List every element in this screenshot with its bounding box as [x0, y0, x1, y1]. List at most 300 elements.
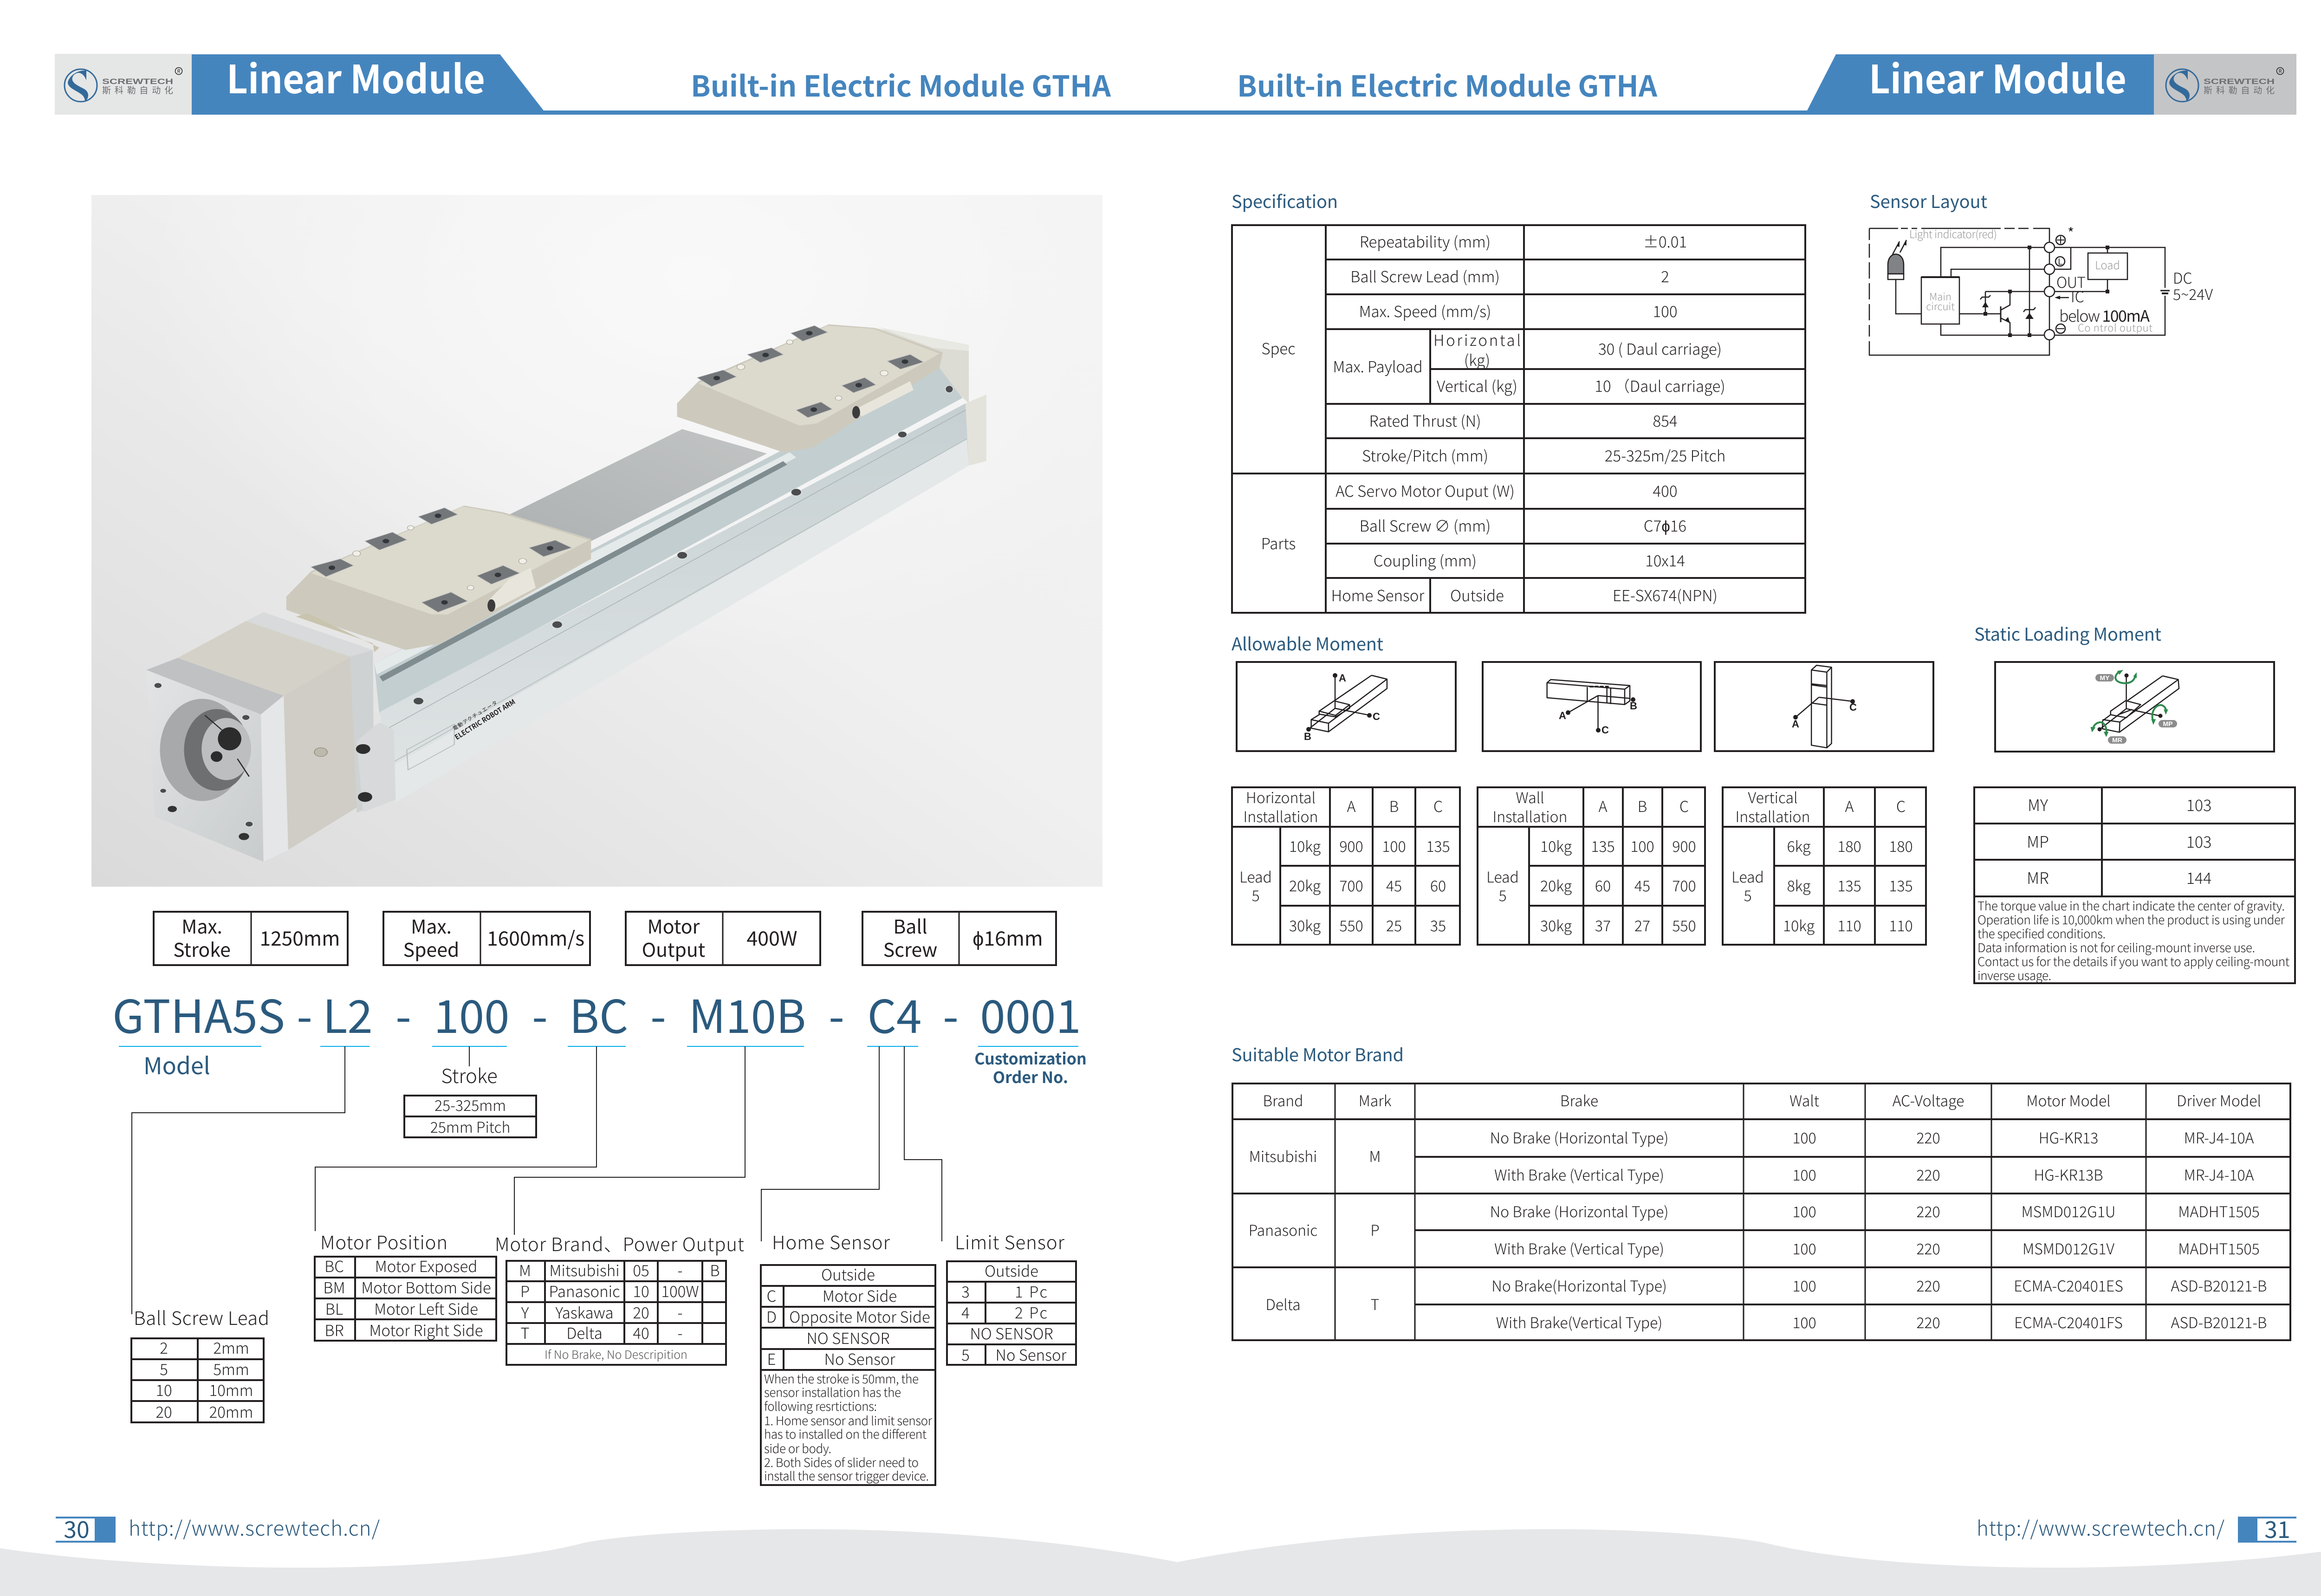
table: motor position: BC [324, 1254, 344, 1277]
label: Home Sensor: Home Sensor [772, 1228, 890, 1255]
limit sensor block [947, 1228, 1076, 1365]
table: suitable motor brand: 100 [1792, 1238, 1816, 1259]
table: motor brand: Y [521, 1301, 529, 1323]
table: suitable motor brand: Walt [1789, 1090, 1819, 1111]
table: suitable motor brand [1232, 1083, 2290, 1340]
spec box: Max. Stroke [154, 911, 348, 965]
model code: - [943, 980, 959, 1046]
table: suitable motor brand: ASD-B20121-B [2171, 1311, 2267, 1333]
table: wall installation: 37 [1595, 915, 1611, 936]
label: Limit Sensor: Limit Sensor [955, 1228, 1065, 1255]
table: specification: Horizontal [1433, 328, 1521, 350]
code underlines [119, 1046, 1078, 1047]
table: ball screw lead: 10 [156, 1378, 172, 1401]
table: home sensor: D [766, 1305, 777, 1327]
notes [1977, 897, 2289, 984]
table: home sensor: NO SENSOR [806, 1326, 890, 1349]
table: home sensor: Opposite Motor Side [789, 1305, 930, 1327]
section: static loading moment [1974, 620, 2295, 984]
spec box: Max. Speed: 1600mm/s [487, 923, 584, 952]
header: left [55, 49, 1176, 115]
notes: Operation life is 10,000km when the product is using under [1977, 911, 2285, 928]
table: specification: Max. Speed (mm/s) [1359, 299, 1491, 322]
table: suitable motor brand: With Brake (Vertical Type) [1494, 1164, 1664, 1185]
table: specification: Repeatability (mm) [1360, 230, 1491, 252]
diagram: static moment: MR [2112, 736, 2122, 744]
table: limit sensor: NO SENSOR [970, 1322, 1053, 1344]
connector lines [132, 1046, 942, 1314]
spec box: Motor Output [626, 911, 820, 965]
notes: Contact us for the details if you want to apply ceiling-mount [1977, 953, 2289, 970]
table: motor position: BR [324, 1318, 344, 1341]
table: static moment values: MP [2027, 830, 2049, 852]
table: wall installation: 100 [1630, 835, 1654, 856]
table: ball screw lead: 10mm [209, 1378, 253, 1401]
table: specification: 25-325m/25 Pitch [1605, 444, 1725, 466]
table: ball screw lead: 5 [160, 1357, 168, 1380]
table: horizontal installation: 100 [1382, 835, 1406, 856]
table: home sensor: 2. Both Sides of slider need to [764, 1453, 919, 1471]
table: static moment values: MY [2028, 793, 2048, 816]
banner: right [1176, 54, 2154, 115]
stroke block [404, 1061, 536, 1137]
spec box: Max. Stroke: 1250mm [260, 923, 340, 952]
model code: - [395, 980, 411, 1046]
spec box: Ball Screw: Ball [893, 911, 927, 939]
table: wall installation: 27 [1634, 915, 1650, 936]
table: specification: ±0.01 [1643, 230, 1687, 252]
table: specification: 400 [1653, 479, 1677, 501]
table: suitable motor brand: MADHT1505 [2178, 1238, 2260, 1259]
table: suitable motor brand: Mitsubishi [1249, 1145, 1317, 1167]
logo: left [55, 54, 192, 115]
diagram: wall installation moment: A [1559, 710, 1566, 721]
table: home sensor: Outside [821, 1263, 875, 1285]
diagram: static moment: MY [2100, 674, 2110, 681]
model code: 100 [434, 980, 510, 1046]
table: motor brand: Yaskawa [555, 1301, 614, 1323]
diagram: sensor circuit: IC [2071, 285, 2084, 307]
table: home sensor: side or body. [764, 1440, 831, 1457]
table: horizontal installation: Installation [1244, 805, 1318, 827]
near carriage [286, 506, 591, 650]
table: specification: 10 （Daul carriage) [1595, 374, 1725, 396]
section: sensor layout [1869, 188, 2213, 355]
table: suitable motor brand: 100 [1792, 1200, 1816, 1222]
table: horizontal installation: 135 [1426, 835, 1450, 856]
carriage screws [419, 508, 458, 524]
table: suitable motor brand: ECMA-C20401FS [2014, 1311, 2123, 1333]
table: motor brand: 40 [633, 1321, 649, 1343]
table: motor position: Motor Exposed [375, 1254, 477, 1277]
table: horizontal installation: 45 [1386, 875, 1402, 896]
model code: C4 [868, 980, 921, 1046]
table: suitable motor brand: MR-J4-10A [2184, 1164, 2254, 1185]
table: suitable motor brand: Delta [1265, 1293, 1301, 1315]
model code: - [650, 980, 666, 1046]
spec box: Ball Screw [862, 911, 1056, 965]
table: wall installation: 5 [1498, 884, 1507, 906]
logo: left: 斯科勒自动化 [102, 84, 173, 96]
table: motor position: BM [323, 1276, 345, 1298]
table: specification: 100 [1653, 299, 1677, 322]
heading: Static Loading Moment: Static Loading Moment [1974, 620, 2161, 646]
diagram: sensor circuit [1869, 222, 2213, 355]
diagram: sensor circuit: * [2068, 222, 2074, 242]
table: limit sensor: 1 Pc [1015, 1280, 1047, 1302]
table: motor brand: - [678, 1301, 682, 1323]
far carriage [677, 324, 943, 452]
table: suitable motor brand: No Brake (Horizontal Type) [1490, 1127, 1668, 1148]
table: specification [1232, 225, 1805, 613]
carriage dimples [353, 551, 361, 556]
table: vertical installation: 135 [1889, 875, 1913, 896]
table: motor brand: T [520, 1321, 530, 1343]
table: horizontal installation: 5 [1251, 884, 1260, 906]
label: Customization Order No.: Order No. [993, 1065, 1068, 1088]
table: limit sensor: 2 Pc [1015, 1301, 1047, 1323]
table: ball screw lead: 20 [156, 1400, 172, 1422]
table: static moment values [1974, 787, 2295, 984]
footer right: url and page number [1977, 1512, 2296, 1545]
table: limit sensor: 3 [961, 1280, 970, 1302]
table: ball screw lead: 20mm [209, 1400, 253, 1422]
table: vertical installation: A [1845, 795, 1854, 817]
table: suitable motor brand: 220 [1916, 1164, 1940, 1185]
subtitle right: Built-in Electric Module GTHA [1237, 63, 1657, 105]
table: vertical installation: 180 [1889, 835, 1913, 856]
table: static moment values: MR [2027, 866, 2049, 889]
mounting plate [357, 722, 395, 812]
footer wave background [0, 1529, 2321, 1596]
model code [112, 980, 1081, 1046]
table: ball screw lead: 2 [160, 1336, 168, 1358]
table: vertical installation: 135 [1837, 875, 1861, 896]
logo: right: 斯科勒自动化 [2204, 84, 2275, 96]
heading: Linear Module right: Linear Module [1869, 49, 2127, 105]
diagram: sensor circuit: L [2058, 255, 2062, 267]
table: suitable motor brand: 100 [1792, 1275, 1816, 1296]
table: suitable motor brand: Brake [1560, 1090, 1598, 1111]
table: vertical installation: C [1896, 795, 1906, 817]
footer right: url and page number: 31 [2264, 1512, 2290, 1545]
notes: Data information is not for ceiling-mount inverse use. [1977, 939, 2255, 956]
table: motor brand: P [520, 1279, 530, 1302]
table: home sensor: E [767, 1347, 776, 1369]
table: motor brand: 100W [661, 1279, 699, 1302]
table: static moment values: 103 [2186, 793, 2211, 816]
table: motor brand: 20 [633, 1301, 649, 1323]
diagram: wall installation moment: C [1601, 724, 1609, 736]
table: suitable motor brand: 220 [1916, 1311, 1940, 1333]
ball screw lead block [131, 1304, 269, 1422]
label: Model: Model [143, 1048, 210, 1081]
table: specification: Home Sensor [1331, 584, 1424, 606]
product photo: linear module [91, 195, 1102, 887]
model code: 0001 [980, 980, 1081, 1046]
table: suitable motor brand: No Brake (Horizontal Type) [1490, 1200, 1668, 1222]
table: suitable motor brand: 220 [1916, 1275, 1940, 1296]
diagram: sensor circuit: DC [2173, 267, 2192, 288]
table: wall installation: 60 [1595, 875, 1611, 896]
heading: Allowable Moment: Allowable Moment [1232, 630, 1383, 655]
table: horizontal installation: 550 [1339, 915, 1363, 936]
table: home sensor: Motor Side [823, 1284, 897, 1306]
diagram: vertical installation moment [1715, 662, 1933, 751]
table: specification: Coupling (mm) [1374, 549, 1477, 571]
table: horizontal installation: C [1433, 795, 1443, 817]
table: vertical installation: 6kg [1787, 835, 1810, 856]
diagram: wall installation moment [1483, 662, 1701, 751]
spec box: Ball Screw: ϕ16mm [972, 923, 1043, 952]
table: home sensor: 1. Home sensor and limit sensor [764, 1412, 933, 1429]
table: wall installation: 20kg [1540, 875, 1572, 896]
table: motor position: Motor Right Side [369, 1318, 483, 1341]
table: suitable motor brand: With Brake(Vertical Type) [1496, 1311, 1662, 1333]
junction dots [1897, 240, 2109, 337]
terminals [2044, 235, 2065, 340]
table: home sensor: When the stroke is 50mm, the [764, 1370, 919, 1387]
table: specification: 30 ( Daul carriage) [1598, 337, 1722, 359]
table: specification: EE-SX674(NPN) [1613, 584, 1718, 606]
lower body side [379, 403, 969, 802]
table: ball screw lead [131, 1336, 264, 1422]
logo: left: SCREWTECH [102, 77, 173, 86]
diagram: sensor circuit: Light indicator(red) [1909, 226, 1997, 241]
indicator LED [1888, 254, 1904, 274]
diagram: sensor circuit: Load [2095, 256, 2120, 272]
table: suitable motor brand: P [1370, 1219, 1380, 1240]
table: motor brand: 10 [633, 1279, 649, 1302]
table: vertical installation: 110 [1889, 915, 1913, 936]
table: motor brand: Panasonic [549, 1279, 620, 1302]
table: limit sensor: 5 [961, 1343, 970, 1365]
table: motor brand: - [678, 1259, 682, 1281]
diagram: horizontal installation moment: C [1373, 711, 1380, 722]
table: vertical installation: Lead [1731, 866, 1764, 887]
table: wall installation [1478, 786, 1705, 945]
label on extrusion: 電動アクチュエータ [451, 699, 499, 732]
logo: right [2154, 54, 2296, 115]
table: suitable motor brand: Panasonic [1249, 1219, 1317, 1240]
motor brand and power block [495, 1230, 744, 1365]
table: motor brand: Mitsubishi [549, 1259, 620, 1281]
footer left: page number and url: http://www.screwtech.cn/ [129, 1512, 380, 1542]
table: suitable motor brand: HG-KR13 [2039, 1127, 2098, 1148]
table: motor position [315, 1254, 496, 1341]
table: suitable motor brand: 220 [1916, 1238, 1940, 1259]
table: limit sensor: 4 [961, 1301, 970, 1323]
table: limit sensor [947, 1259, 1076, 1365]
upper rail side [374, 368, 962, 714]
table: limit sensor: No Sensor [995, 1343, 1067, 1365]
table: suitable motor brand: Driver Model [2177, 1090, 2261, 1111]
holes on body [413, 697, 424, 705]
belt cover [510, 429, 767, 541]
model code: M10B [689, 980, 806, 1046]
diagram: sensor circuit: OUT [2056, 271, 2086, 292]
table: wall installation: 700 [1672, 875, 1696, 896]
heading: Specification: Specification [1232, 188, 1338, 213]
diagram: sensor circuit: 5~24V [2173, 283, 2213, 305]
table: wall installation: 10kg [1540, 835, 1572, 856]
table: suitable motor brand: 100 [1792, 1164, 1816, 1185]
table: specification: Rated Thrust (N) [1369, 409, 1481, 431]
notes: inverse usage. [1977, 967, 2051, 984]
table: specification: Max. Payload [1333, 355, 1423, 377]
table: motor position: Motor Left Side [374, 1297, 478, 1319]
table: motor brand: B [710, 1259, 720, 1281]
table: vertical installation: 180 [1837, 835, 1861, 856]
spec box: Max. Stroke: Stroke [173, 934, 231, 962]
table: specification: Spec [1261, 337, 1296, 359]
spec box: Max. Speed [383, 911, 590, 965]
heading: Sensor Layout: Sensor Layout [1870, 188, 1987, 213]
table: wall installation: 30kg [1540, 915, 1572, 936]
table: specification: Ball Screw ∅ (mm) [1360, 514, 1491, 536]
table: motor brand: If No Brake, No Descripition [545, 1346, 687, 1362]
table: suitable motor brand: Brand [1263, 1090, 1303, 1111]
table: home sensor [761, 1263, 935, 1485]
diagram: sensor circuit: Main [1929, 289, 1951, 304]
diagram: horizontal installation moment: A [1339, 672, 1346, 684]
table: suitable motor brand: With Brake (Vertical Type) [1494, 1238, 1664, 1259]
table: wall installation: 900 [1672, 835, 1696, 856]
table: static moment values: 103 [2186, 830, 2211, 852]
table: suitable motor brand: M [1369, 1145, 1381, 1167]
spec box: Motor Output: 400W [746, 923, 797, 952]
table: vertical installation [1723, 786, 1926, 945]
table: horizontal installation: 25 [1386, 915, 1402, 936]
table: specification: C7ϕ16 [1644, 514, 1686, 536]
table: specification: 10x14 [1645, 549, 1685, 571]
diagram: wall installation moment: B [1630, 700, 1637, 712]
diagram: horizontal installation moment [1237, 662, 1456, 751]
table: horizontal installation: Lead [1239, 866, 1272, 887]
logo: right: R [2278, 67, 2282, 75]
table: motor brand: 05 [633, 1259, 649, 1281]
table: wall installation: 135 [1591, 835, 1615, 856]
model code: BC [570, 980, 628, 1046]
table: suitable motor brand: No Brake(Horizontal Type) [1491, 1275, 1667, 1296]
motor position block [315, 1228, 496, 1341]
table: wall installation: 550 [1672, 915, 1696, 936]
spec box: Max. Speed: Speed [403, 934, 459, 962]
table: suitable motor brand: MSMD012G1V [2023, 1238, 2114, 1259]
table: limit sensor: Outside [985, 1259, 1038, 1281]
model code: L2 [323, 980, 373, 1046]
table: horizontal installation: 700 [1339, 875, 1363, 896]
table: vertical installation: 8kg [1787, 875, 1810, 896]
table: static moment values: 144 [2186, 866, 2211, 889]
table: horizontal installation: 900 [1339, 835, 1363, 856]
heading: Suitable Motor Brand: Suitable Motor Brand [1232, 1041, 1404, 1066]
logo: right: SCREWTECH [2204, 77, 2275, 86]
table: specification: 2 [1661, 265, 1669, 287]
table: suitable motor brand: AC-Voltage [1893, 1090, 1964, 1111]
heading: Linear Module left: Linear Module [227, 49, 485, 105]
table: home sensor: following resrtictions: [764, 1397, 877, 1414]
table: vertical installation: Vertical [1748, 786, 1797, 808]
table: specification: Ball Screw Lead (mm) [1350, 265, 1500, 287]
table: stroke [404, 1094, 536, 1137]
diagram: sensor circuit: circuit [1926, 298, 1955, 313]
diagram: vertical installation moment: A [1792, 718, 1799, 730]
banner: left [192, 54, 1176, 115]
label: Customization Order No. [974, 1046, 1087, 1088]
table: vertical installation: 10kg [1783, 915, 1815, 936]
table: horizontal installation: 35 [1430, 915, 1446, 936]
table: motor position: BL [325, 1297, 343, 1319]
footer left: page number and url: 30 [64, 1512, 90, 1545]
model code: - [829, 980, 844, 1046]
table: motor brand: - [678, 1321, 682, 1343]
spec box: Max. Stroke: Max. [182, 911, 222, 939]
table: suitable motor brand: ASD-B20121-B [2171, 1275, 2267, 1296]
spec box: Ball Screw: Screw [883, 934, 937, 962]
section: allowable moment [1232, 630, 1933, 945]
notes: the specified conditions. [1977, 925, 2106, 942]
diagram: vertical installation moment: C [1849, 701, 1857, 713]
footer right: url and page number: http://www.screwtech.cn/ [1977, 1512, 2224, 1542]
table: specification: Parts [1261, 532, 1296, 554]
table: specification: Vertical (kg) [1437, 374, 1517, 396]
table: vertical installation: 110 [1837, 915, 1861, 936]
table: home sensor: sensor installation has the [764, 1383, 901, 1401]
label: Stroke: Stroke [441, 1061, 498, 1089]
model code: - [532, 980, 548, 1046]
spec box: Max. Speed: Max. [411, 911, 452, 939]
header: right [1176, 49, 2296, 115]
table: horizontal installation: 20kg [1289, 875, 1321, 896]
table: motor brand [506, 1259, 726, 1365]
table: horizontal installation: A [1347, 795, 1356, 817]
table: suitable motor brand: T [1371, 1293, 1379, 1315]
spec box: Motor Output: Motor [648, 911, 700, 939]
table: wall installation: C [1679, 795, 1689, 817]
notes: The torque value in the chart indicate the center of gravity. [1977, 897, 2285, 914]
table: suitable motor brand: 100 [1792, 1127, 1816, 1148]
table: specification: AC Servo Motor Ouput (W) [1336, 479, 1515, 501]
table: suitable motor brand: 220 [1916, 1200, 1940, 1222]
table: home sensor: install the sensor trigger device. [764, 1467, 929, 1484]
table: horizontal installation: 30kg [1289, 915, 1321, 936]
table: wall installation: A [1599, 795, 1608, 817]
table: suitable motor brand: MSMD012G1U [2021, 1200, 2116, 1222]
diagram: static moment: MP [2163, 720, 2172, 727]
table: vertical installation: Installation [1736, 805, 1810, 827]
table: suitable motor brand: HG-KR13B [2034, 1164, 2103, 1185]
model code: - [297, 980, 312, 1046]
table: wall installation: 45 [1634, 875, 1650, 896]
label on extrusion: ELECTRIC ROBOT ARM [453, 697, 517, 742]
diagram: sensor circuit: below 100mA [2059, 304, 2150, 326]
label: Ball Screw Lead: Ball Screw Lead [134, 1304, 269, 1330]
table: ball screw lead: 5mm [213, 1357, 249, 1380]
table: specification: 854 [1653, 409, 1677, 431]
home sensor block [761, 1228, 935, 1485]
table: stroke: 25mm Pitch [430, 1116, 510, 1137]
silver flange behind motor block [246, 612, 373, 656]
table: stroke: 25-325mm [434, 1094, 506, 1116]
table: horizontal installation [1232, 786, 1460, 945]
table: wall installation: B [1638, 795, 1647, 817]
table: suitable motor brand: Mark [1359, 1090, 1392, 1111]
table: home sensor: has to installed on the different [764, 1425, 927, 1442]
table: home sensor: No Sensor [824, 1347, 895, 1369]
table: motor brand: Delta [566, 1321, 603, 1343]
far end cap [966, 395, 986, 466]
